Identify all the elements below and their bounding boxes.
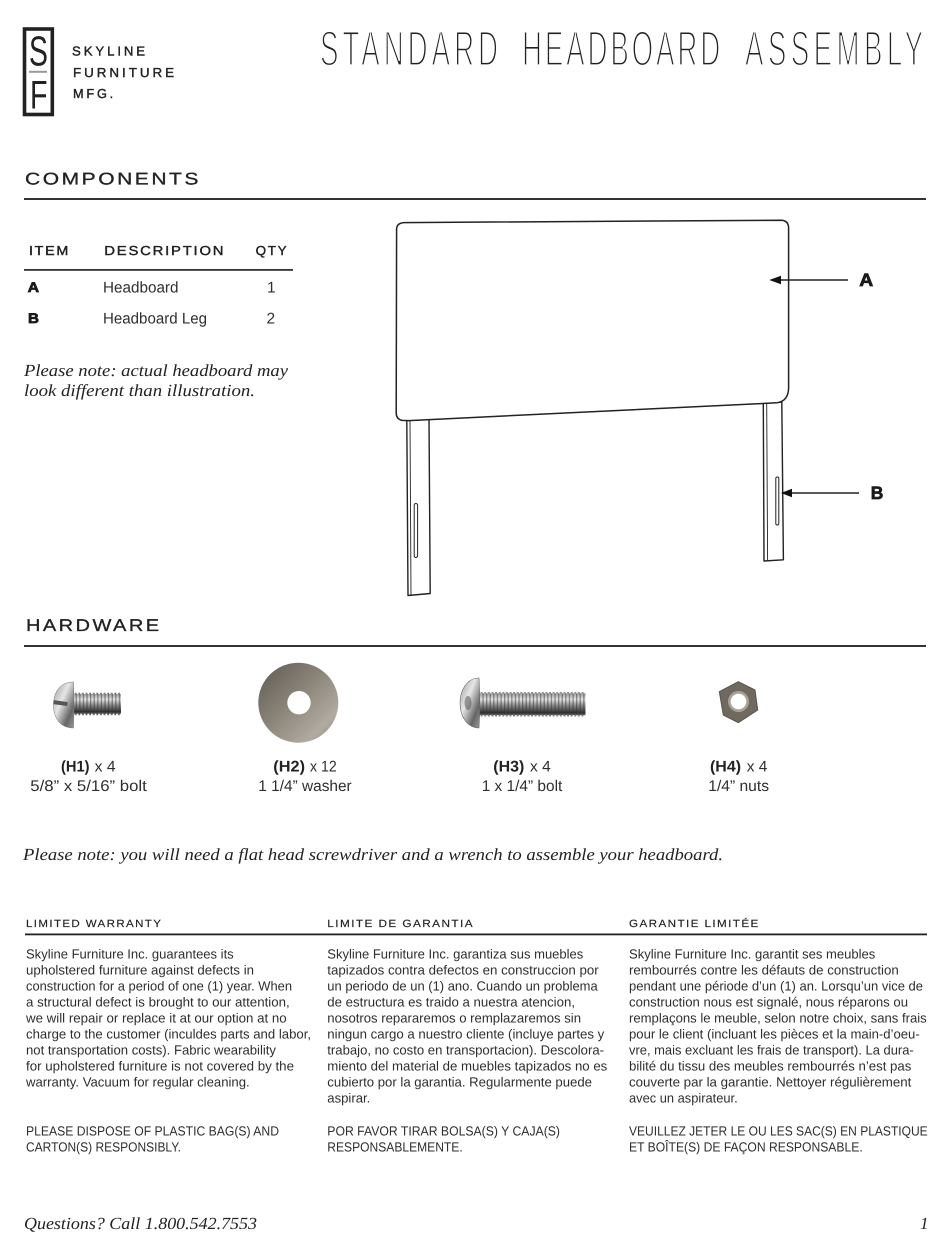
H4 caption: x 4 — [747, 758, 768, 776]
arrow and label: B: B — [871, 483, 883, 503]
warranty text: French: avec un aspirateur. — [629, 1090, 738, 1105]
warranty text: English: CARTON(S) RESPONSIBLY. — [26, 1139, 181, 1154]
warranty rule and column headings: GARANTIE LIMITÉE — [629, 917, 760, 930]
headboard diagram — [396, 220, 789, 595]
warranty text: Spanish: aspirar. — [327, 1090, 370, 1105]
warranty text: English: upholstered furniture against defects in — [26, 962, 254, 977]
company name: SKYLINE — [72, 44, 148, 58]
row B: Headboard Leg — [103, 310, 207, 327]
table header: QTY — [256, 243, 288, 258]
row A: A — [28, 279, 39, 295]
warranty text: English: not transportation costs). Fabric wearability — [26, 1042, 276, 1057]
H4 caption: (H4) — [710, 758, 741, 776]
note: illustration: Please note: actual headboard may — [23, 361, 288, 380]
note: illustration — [23, 361, 288, 400]
warranty text: English: we will repair or replace it at our option at no — [25, 1010, 287, 1025]
warranty text: Spanish: POR FAVOR TIRAR BOLSA(S) Y CAJA(S) — [327, 1123, 560, 1138]
arrow and label: A — [769, 270, 873, 290]
row B: 2 — [266, 310, 275, 327]
warranty text: English — [25, 946, 311, 1154]
table header: ITEM — [29, 243, 70, 258]
H1 caption: 5/8” x 5/16” bolt — [30, 778, 148, 795]
row B — [28, 310, 275, 327]
footer: page number: 1 — [920, 1214, 928, 1233]
warranty rule and column headings: LIMITE DE GARANTIA — [327, 918, 474, 930]
warranty text: English: construction for a period of one (1) year. When — [26, 978, 292, 993]
H2 caption: (H2) — [273, 758, 305, 776]
right leg — [763, 402, 783, 561]
logo mark: SF monogram — [24, 28, 52, 118]
warranty text: French: Skyline Furniture Inc. garantit ses meubles — [629, 946, 876, 961]
components table — [24, 243, 293, 327]
warranty text: Spanish: miento del material de muebles tapizados no es — [327, 1058, 608, 1073]
heading: components: COMPONENTS — [25, 170, 201, 188]
H2 caption: x 12 — [310, 758, 337, 776]
table header — [24, 243, 293, 271]
icon: hex nut — [719, 682, 758, 723]
warranty text: English: charge to the customer (inculdes parts and labor, — [26, 1026, 311, 1041]
warranty text: Spanish: cubierto por la garantia. Regularmente puede — [327, 1074, 592, 1089]
row B: B — [28, 310, 39, 326]
H3 caption — [482, 758, 563, 795]
title: STANDARD — [320, 22, 498, 76]
H1 caption: x 4 — [95, 758, 116, 776]
warranty text: French: pendant une période d’un (1) an. Lorsqu’un vice de — [629, 978, 923, 993]
arrow and label: B — [781, 483, 883, 503]
warranty text: French: remplaçons le meuble, selon notre choix, sans frais — [629, 1010, 927, 1025]
company name: MFG. — [73, 86, 116, 101]
H2 caption — [258, 758, 352, 795]
note: tools needed: Please note: you will need a flat head screwdriver and a wrench to assemble your headboard. — [22, 845, 723, 864]
H4 caption: 1/4” nuts — [708, 778, 769, 795]
warranty text: Spanish: de estructura es traido a nuestra atencion, — [327, 994, 575, 1009]
warranty text: English: a structural defect is brought to our attention, — [26, 994, 290, 1009]
warranty text: English: warranty. Vacuum for regular cleaning. — [25, 1074, 250, 1089]
title: HEADBOARD — [522, 22, 720, 76]
warranty text: Spanish: Skyline Furniture Inc. garantiza sus muebles — [327, 946, 584, 961]
warranty text: Spanish — [327, 946, 608, 1154]
row A — [28, 279, 276, 296]
icon: short bolt — [53, 682, 121, 728]
logo: Skyline Furniture Mfg. — [24, 28, 177, 118]
warranty text: French: VEUILLEZ JETER LE OU LES SAC(S) EN PLASTIQUE — [629, 1123, 928, 1138]
warranty text: English: for upholstered furniture is not covered by the — [26, 1058, 294, 1073]
warranty text: French: ET BOÎTE(S) DE FAÇON RESPONSABLE. — [629, 1139, 863, 1154]
logo mark: SF monogram: S — [29, 28, 48, 74]
warranty text: French: couverte par la garantie. Nettoyer régulièrement — [629, 1074, 912, 1089]
heading: hardware: HARDWARE — [26, 616, 162, 635]
H4 caption — [708, 758, 769, 795]
title: ASSEMBLY — [745, 22, 923, 76]
warranty text: English: PLEASE DISPOSE OF PLASTIC BAG(S) AND — [26, 1123, 279, 1138]
H1 caption — [30, 758, 148, 795]
footer: phone number: Questions? Call 1.800.542.7553 — [24, 1214, 257, 1233]
warranty text: Spanish: ningun cargo a nuestro cliente (incluye partes y — [327, 1026, 605, 1041]
hardware H1 — [30, 682, 148, 795]
H3 caption: x 4 — [530, 758, 551, 776]
headboard panel — [396, 220, 789, 421]
title — [320, 22, 923, 76]
warranty text: Spanish: trabajo, no costo en transportacion). Descolora- — [327, 1042, 604, 1057]
icon: washer — [258, 663, 338, 743]
table header: DESCRIPTION — [104, 243, 225, 258]
warranty text: French: vre, mais excluant les frais de transport). La dura- — [629, 1042, 914, 1057]
logo mark: SF monogram: F — [30, 74, 47, 118]
hardware H2 — [258, 663, 352, 795]
warranty text: French: rembourrés contre les défauts de construction — [629, 962, 899, 977]
H2 caption: 1 1/4” washer — [258, 778, 352, 795]
warranty text: French: construction nous est signalé, nous réparons ou — [629, 994, 908, 1009]
hardware H4 — [708, 682, 769, 795]
row A: 1 — [267, 279, 276, 296]
company name: FURNITURE — [73, 65, 177, 80]
left leg — [407, 419, 430, 596]
warranty text: Spanish: un periodo de un (1) ano. Cuando un problema — [327, 978, 598, 993]
company name — [72, 44, 177, 101]
warranty text: Spanish: tapizados contra defectos en construccion por — [327, 962, 599, 977]
warranty text: French: bilité du tissu des meubles rembourrés n’est pas — [629, 1058, 912, 1073]
warranty text: French — [629, 946, 928, 1154]
arrow and label: A: A — [859, 270, 873, 290]
hardware H3 — [460, 678, 586, 795]
icon: long bolt — [460, 678, 586, 728]
H3 caption: (H3) — [493, 758, 524, 776]
note: illustration: look different than illustration. — [24, 381, 255, 400]
row A: Headboard — [103, 279, 178, 296]
warranty rule and column headings — [25, 917, 927, 935]
warranty text: French: pour le client (incluant les pièces et la main-d’oeu- — [629, 1026, 920, 1041]
H1 caption: (H1) — [61, 758, 90, 776]
warranty rule and column headings: LIMITED WARRANTY — [26, 918, 162, 930]
warranty text: Spanish: RESPONSABLEMENTE. — [327, 1139, 463, 1154]
H3 caption: 1 x 1/4” bolt — [482, 778, 563, 795]
warranty text: English: Skyline Furniture Inc. guarantees its — [26, 946, 234, 961]
warranty text: Spanish: nosotros repararemos o remplazaremos sin — [327, 1010, 581, 1025]
